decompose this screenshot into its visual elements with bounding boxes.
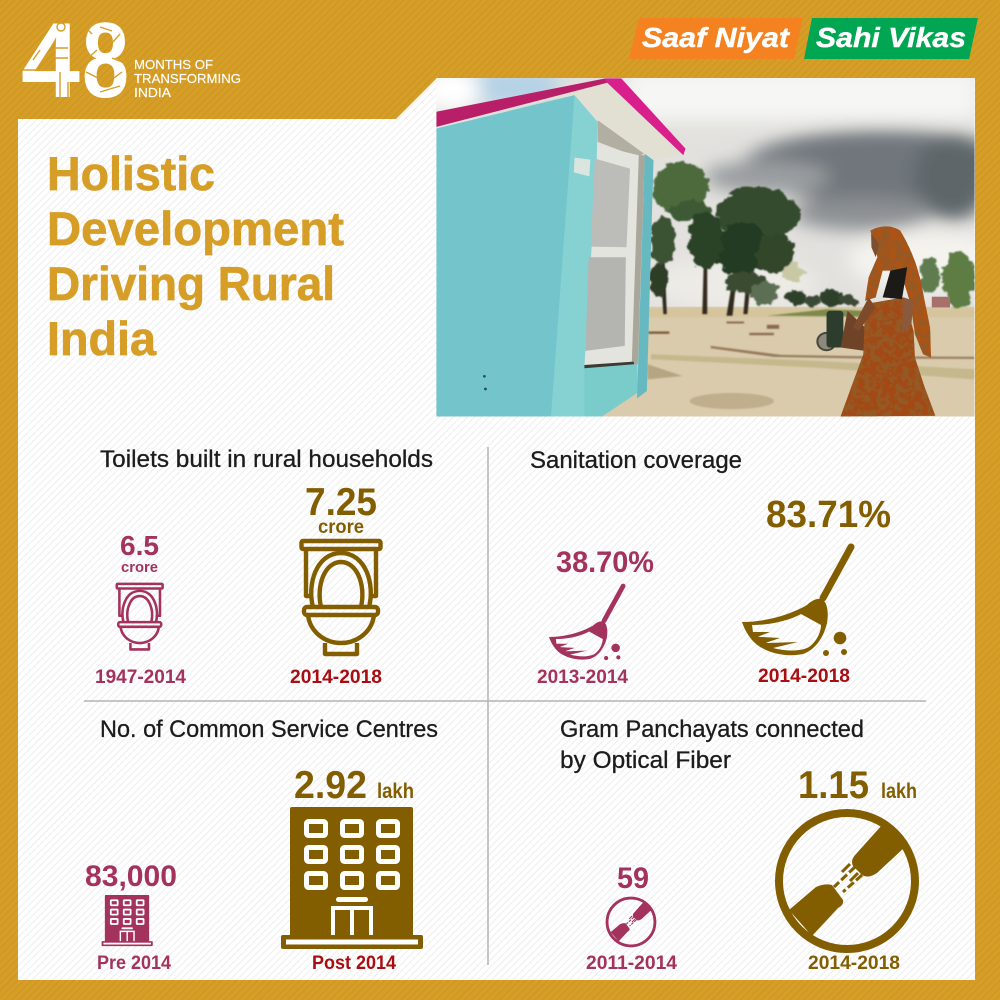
- stat: 6.5 crore: 6.5: [120, 530, 159, 561]
- stat: 1.15 lakh: 1.15: [798, 764, 869, 807]
- stat: 2.92 lakh: lakh: [377, 780, 414, 803]
- icon: large toilet: [302, 541, 380, 654]
- logo: 48 months of transforming India: [21, 0, 241, 120]
- label: 2014-2018: 2014-2018: [758, 666, 850, 687]
- panel: common service centres: [85, 716, 438, 974]
- stat: 1.15 lakh: [798, 764, 917, 807]
- title: [47, 147, 344, 365]
- logo caption: MONTHS OF: [134, 57, 213, 72]
- heading: sanitation: Sanitation coverage: [530, 447, 742, 474]
- title: Driving Rural: [47, 257, 335, 310]
- panel: sanitation coverage: [530, 447, 891, 688]
- label: 2014-2018: 2014-2018: [290, 667, 382, 688]
- stat: 7.25 crore: crore: [318, 517, 364, 538]
- stat: 6.5 crore: [120, 530, 159, 576]
- label: 2011-2014: 2011-2014: [586, 953, 677, 974]
- stat: 83.71%: 83.71%: [766, 494, 891, 536]
- stat: 7.25 crore: 7.25: [305, 481, 377, 524]
- icon: large fiber: [779, 813, 915, 949]
- heading: optical fiber: Gram Panchayats connected: [560, 716, 864, 743]
- label: Pre 2014: Pre 2014: [97, 953, 171, 974]
- icon: small broom: [549, 586, 623, 660]
- label: 2014-2018: 2014-2018: [808, 953, 900, 974]
- photo: rural toilet and woman walking: [421, 70, 1000, 416]
- toilet building: [436, 78, 685, 416]
- tiller machine: [817, 311, 869, 351]
- stat: 1.15 lakh: lakh: [881, 780, 917, 803]
- stat: 38.70%: 38.70%: [556, 546, 654, 579]
- badge: Sahi Vikas: [804, 18, 978, 59]
- logo numerals: 8: [82, 0, 129, 120]
- logo numerals: 4: [21, 0, 80, 120]
- heading: toilets: Toilets built in rural households: [100, 446, 433, 473]
- stat: 2.92 lakh: [294, 764, 414, 807]
- icon: small building: [102, 895, 153, 946]
- icon: large building: [281, 807, 423, 949]
- icon: small toilet: [117, 584, 163, 649]
- badge: Saaf Niyat: Saaf Niyat: [642, 22, 791, 53]
- label: 2013-2014: 2013-2014: [537, 667, 628, 688]
- panel: optical fiber: [560, 716, 917, 974]
- stat: 59: 59: [617, 862, 649, 895]
- woman: [841, 226, 935, 416]
- stat: 6.5 crore: crore: [121, 559, 158, 576]
- title: India: [47, 312, 157, 365]
- icon: large broom: [742, 547, 851, 656]
- stat: 2.92 lakh: 2.92: [294, 764, 367, 807]
- icon: small fiber: [607, 898, 655, 946]
- stat: 83,000: 83,000: [85, 860, 177, 893]
- heading: optical fiber: by Optical Fiber: [560, 747, 731, 774]
- heading: service centres: No. of Common Service Centres: [100, 716, 438, 743]
- ground: [436, 307, 975, 416]
- logo numerals: [21, 0, 129, 120]
- badge: Sahi Vikas: Sahi Vikas: [816, 22, 966, 53]
- panel: toilets built: [95, 446, 433, 688]
- heading: optical fiber: [560, 716, 864, 774]
- badge: Saaf Niyat: [629, 18, 803, 59]
- logo caption: [134, 57, 241, 100]
- divider lines: [84, 447, 926, 965]
- label: Post 2014: Post 2014: [312, 953, 396, 974]
- title: Holistic: [47, 147, 215, 200]
- logo caption: INDIA: [134, 85, 171, 100]
- trees: [660, 257, 750, 316]
- label: 1947-2014: 1947-2014: [95, 667, 186, 688]
- logo caption: TRANSFORMING: [134, 71, 241, 86]
- title: Development: [47, 202, 344, 255]
